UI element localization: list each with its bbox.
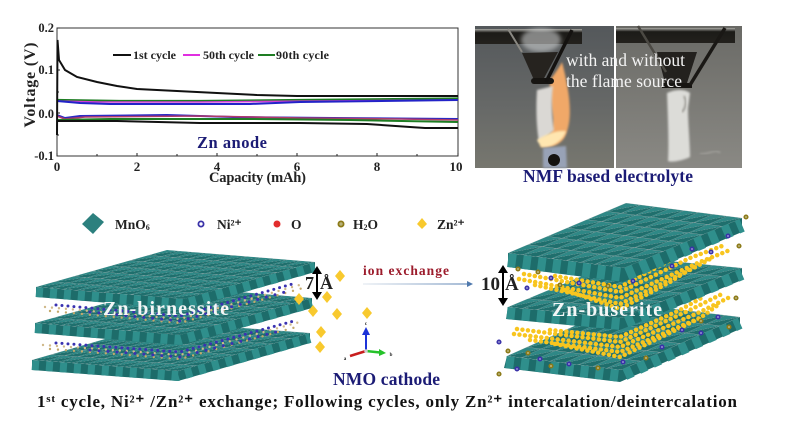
structure: Zn-buserite [497, 203, 748, 382]
y axis tick labels: 0.2 [38, 21, 54, 35]
x axis tick labels: 2 [134, 159, 140, 174]
curve: 50th cycle [57, 100, 458, 102]
spacing marker: 10 angstrom: Å [505, 274, 519, 295]
text: H2O: H [353, 217, 364, 232]
axis ticks [57, 28, 458, 156]
curve: magenta and red discharge [57, 116, 458, 120]
y axis tick labels: 0.0 [38, 107, 54, 121]
text: O: O [291, 217, 302, 232]
curve: 1st cycle charge [57, 40, 458, 135]
curve: 90th cycle [57, 98, 458, 101]
label: NMF based electrolyte: NMF based electrolyte [523, 166, 693, 186]
photo: without flame [616, 26, 742, 168]
curve: blue cycle discharge [57, 115, 458, 119]
text: Zn2+: Zn²⁺ [437, 217, 465, 232]
y axis tick labels: -0.1 [34, 149, 54, 163]
lower ion band [43, 321, 300, 359]
arrow: ion exchange [363, 281, 473, 287]
x axis tick labels: 10 [450, 159, 462, 174]
crystal axes: a [344, 357, 347, 362]
spacing marker: 10 angstrom [481, 265, 519, 306]
upper ion band [45, 283, 303, 323]
photo: with flame [475, 26, 614, 168]
plot frame [57, 28, 458, 156]
chart legend [113, 48, 330, 62]
chart legend: 1st cycle [133, 48, 177, 62]
curve: blue cycle charge [57, 100, 458, 104]
x axis title: Capacity (mAh) [209, 170, 306, 186]
bottom caption: cycle, Ni²⁺ /Zn²⁺ exchange; Following cycles, only Zn²⁺ intercalation/deintercalation [56, 392, 738, 411]
label: NMO cathode: NMO cathode [333, 369, 440, 389]
icon: O dot [274, 220, 280, 228]
photo caption overlay: with and without [566, 50, 685, 70]
bottom caption: st [46, 393, 55, 405]
top layer [36, 250, 315, 309]
icon: MnO6 octahedron [82, 213, 104, 234]
free Zn ions near birnessite [294, 270, 372, 353]
y axis title: Voltage (V) [22, 42, 39, 128]
spacing marker: 7 angstrom [305, 266, 333, 300]
text: H2O: 2 [364, 223, 368, 232]
top layer [508, 203, 742, 282]
divider between photos [614, 26, 616, 168]
chart legend: 50th cycle [203, 48, 255, 62]
icon: H2O dot [338, 221, 344, 227]
middle layer [506, 257, 742, 330]
legend: ion and polyhedron key [82, 213, 465, 234]
panel: Zn anode voltage chart [22, 21, 462, 186]
upper Zn band [519, 244, 730, 309]
middle layer [35, 286, 312, 345]
photo caption overlay [566, 50, 685, 91]
text: MnO6: MnO [115, 217, 146, 232]
y axis tick labels [34, 21, 54, 163]
x axis tick labels: 4 [214, 159, 221, 174]
Ni ions [497, 234, 730, 371]
x axis tick labels [54, 159, 462, 174]
bottom caption: 1 [37, 392, 46, 411]
x axis tick labels: 0 [54, 159, 60, 174]
label: Zn-buserite: Zn-buserite [552, 299, 662, 321]
spacing marker: 7 angstrom: Å [320, 273, 333, 293]
bottom layer [504, 303, 740, 382]
crystal axes: b [390, 353, 393, 358]
chart legend: 90th cycle [276, 48, 330, 62]
curve: green discharge [57, 119, 458, 122]
x axis tick labels: 8 [374, 159, 381, 174]
y axis tick labels: 0.1 [38, 63, 54, 77]
x axis tick labels: 6 [294, 159, 301, 174]
crystal axes: c [365, 322, 368, 327]
label: ion exchange: ion exchange [363, 263, 449, 278]
label: Zn anode: Zn anode [197, 133, 267, 152]
text: Ni2+: Ni²⁺ [217, 217, 242, 232]
crystal axes [344, 322, 393, 362]
photo caption overlay: the flame source [566, 71, 682, 91]
lower Zn band [514, 294, 730, 357]
text: MnO6: 6 [146, 223, 150, 232]
curve: 1st cycle discharge [57, 121, 458, 128]
H2O molecules [497, 215, 748, 376]
bottom layer [32, 322, 310, 381]
icon: Ni dot [198, 221, 204, 227]
panel: flame test photographs [475, 26, 742, 186]
label: Zn-birnessite: Zn-birnessite [103, 298, 229, 320]
spacing marker: 7 angstrom: 7 [305, 273, 314, 293]
text: H2O: O [368, 217, 378, 232]
spacing marker: 10 angstrom: 10 [481, 274, 500, 295]
structure: Zn-birnessite [32, 250, 315, 381]
icon: Zn diamond [417, 218, 427, 229]
